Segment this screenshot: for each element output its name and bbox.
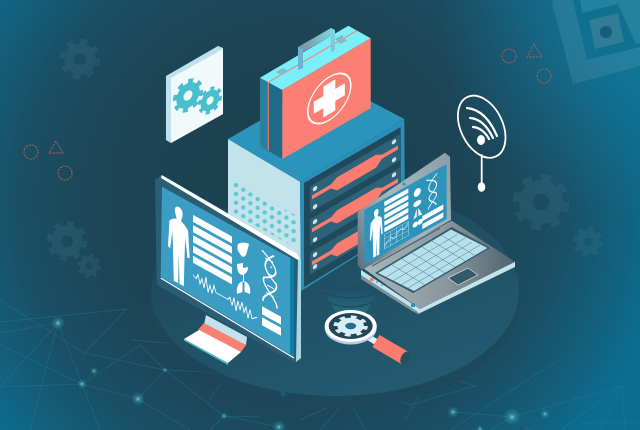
monitor body	[155, 175, 301, 363]
laptop base	[361, 221, 515, 315]
laptop	[358, 153, 515, 315]
monitor screen	[161, 187, 294, 357]
icon: organs	[237, 242, 250, 294]
patient data bars	[193, 215, 232, 284]
briefcase handle	[276, 28, 347, 75]
laptop organs	[413, 185, 423, 229]
server rack panel	[304, 127, 401, 287]
laptop lower bars	[422, 204, 443, 229]
first aid briefcase	[260, 26, 371, 159]
rack unit 1	[310, 134, 400, 213]
gear card	[166, 46, 223, 143]
network nodes	[51, 316, 550, 430]
heartbeat line	[193, 270, 257, 323]
icon: medical cross	[308, 64, 351, 133]
icon: human body small	[370, 206, 383, 260]
server tower	[228, 80, 405, 291]
server front frame	[300, 119, 405, 291]
rack unit 2	[310, 167, 400, 246]
icon: gear in lens	[336, 317, 365, 335]
server vent dots	[233, 181, 297, 248]
magnifying glass	[325, 310, 413, 366]
server top	[228, 80, 404, 182]
laptop lid	[358, 153, 451, 270]
funnel beam under server	[320, 286, 381, 322]
background gears	[50, 42, 601, 276]
icon: gears	[175, 77, 220, 116]
desktop monitor	[155, 175, 301, 363]
laptop ports	[370, 278, 415, 307]
rack unit 3	[310, 218, 370, 275]
dashed shapes right	[502, 44, 551, 83]
icon: human body	[168, 201, 190, 289]
platform	[150, 186, 520, 408]
keyboard	[378, 230, 488, 291]
bottom bars	[262, 306, 281, 336]
briefcase front	[282, 38, 371, 159]
server left face	[228, 139, 301, 291]
touchpad	[448, 268, 478, 285]
briefcase side	[260, 78, 282, 159]
laptop data bars	[384, 188, 408, 232]
dashed shapes left	[24, 141, 72, 180]
wifi sign	[448, 88, 515, 192]
magnifier handle	[368, 337, 413, 366]
network lines	[0, 300, 640, 430]
screen content	[168, 197, 281, 340]
laptop graph	[384, 221, 408, 249]
laptop DNA	[426, 173, 437, 210]
laptop screen	[364, 164, 447, 265]
monitor stand	[184, 315, 247, 365]
briefcase top	[260, 26, 371, 90]
icon: DNA helix	[262, 249, 277, 309]
logo mark: top right squares	[552, 0, 640, 84]
